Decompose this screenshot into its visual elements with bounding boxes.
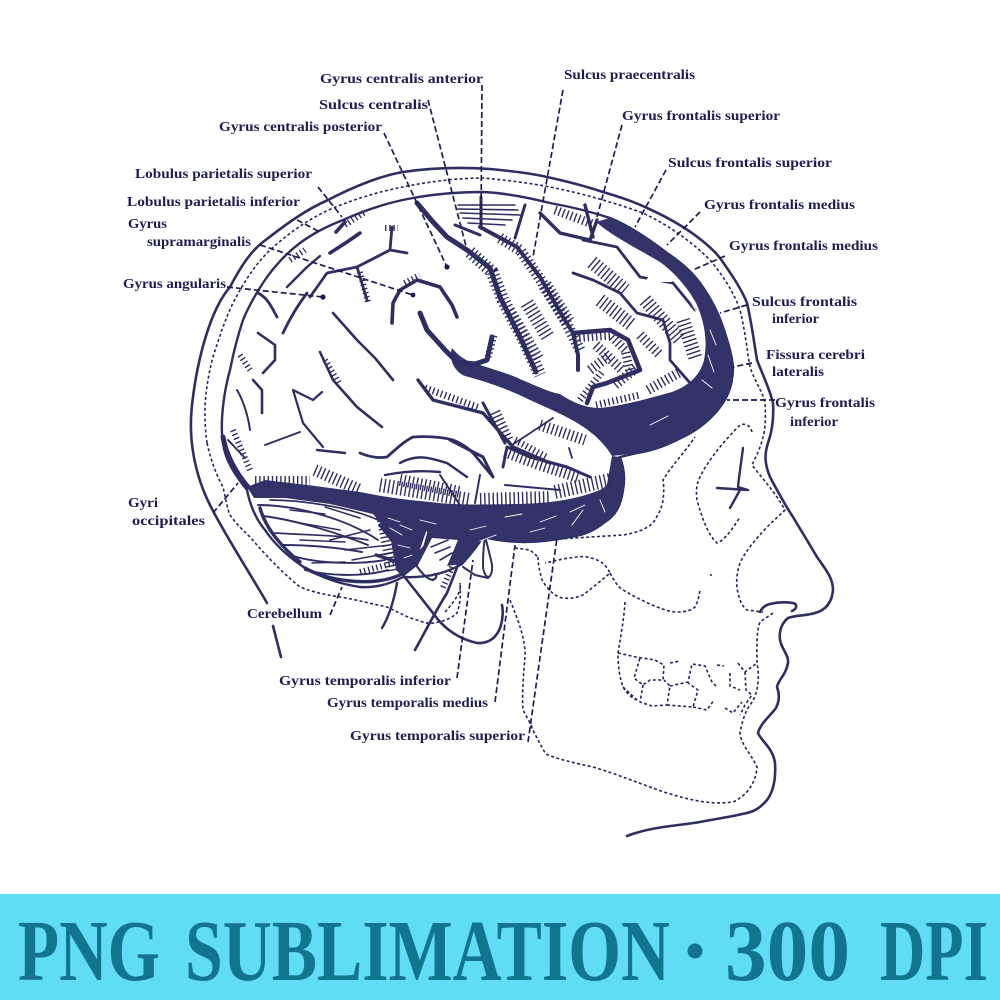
teeth xyxy=(618,653,757,715)
anatomical labels: Gyrus frontalis superior xyxy=(622,108,780,123)
lower dark band xyxy=(223,437,612,577)
leader lines xyxy=(213,85,775,742)
banner: PNG xyxy=(18,902,160,999)
anatomical labels: Gyrus frontalis medius xyxy=(729,238,878,253)
anatomical labels: Gyrus frontalis xyxy=(775,395,875,410)
anatomical labels: supramarginalis xyxy=(147,234,251,249)
anatomical labels: Fissura cerebri xyxy=(766,347,865,362)
banner xyxy=(0,894,1000,1000)
anatomical labels: Gyrus frontalis medius xyxy=(704,197,855,212)
head outline xyxy=(191,168,833,836)
anatomical labels xyxy=(123,67,878,743)
anatomical labels: Gyrus centralis posterior xyxy=(219,119,382,134)
anatomical labels: Cerebellum xyxy=(247,606,323,621)
anatomical labels: Gyrus angularis xyxy=(123,276,226,291)
anatomical labels: Sulcus centralis xyxy=(319,97,428,112)
temporal hatching xyxy=(233,300,716,541)
anatomical labels: Sulcus frontalis xyxy=(752,294,857,309)
brainstem and ear lines xyxy=(382,530,503,650)
anatomical labels: Lobulus parietalis superior xyxy=(135,166,312,181)
anatomical labels: lateralis xyxy=(772,364,824,379)
banner: 300 xyxy=(725,902,850,999)
anatomical labels: Gyrus xyxy=(128,216,167,231)
brain silhouette xyxy=(222,192,733,587)
anatomical labels: Gyrus temporalis inferior xyxy=(279,673,451,688)
anatomical labels: inferior xyxy=(772,311,819,326)
anatomical labels: Sulcus praecentralis xyxy=(564,67,695,82)
anatomical labels: occipitales xyxy=(132,513,205,528)
anatomical labels: Gyri xyxy=(128,495,158,510)
cortical sulci xyxy=(228,197,696,478)
skull dotted outline xyxy=(205,178,785,803)
anatomical labels: Gyrus temporalis medius xyxy=(327,695,488,710)
anatomical labels: Sulcus frontalis superior xyxy=(668,155,832,170)
frontal dark rim and lateral fissure xyxy=(451,218,733,522)
banner: SUBLIMATION xyxy=(185,902,670,999)
anatomical labels: Gyrus centralis anterior xyxy=(320,71,483,86)
anatomical labels: Gyrus temporalis superior xyxy=(350,728,525,743)
cerebellum xyxy=(258,500,412,582)
anatomical labels: inferior xyxy=(790,414,838,429)
anatomical labels: Lobulus parietalis inferior xyxy=(127,194,300,209)
eye socket mark xyxy=(710,448,748,576)
